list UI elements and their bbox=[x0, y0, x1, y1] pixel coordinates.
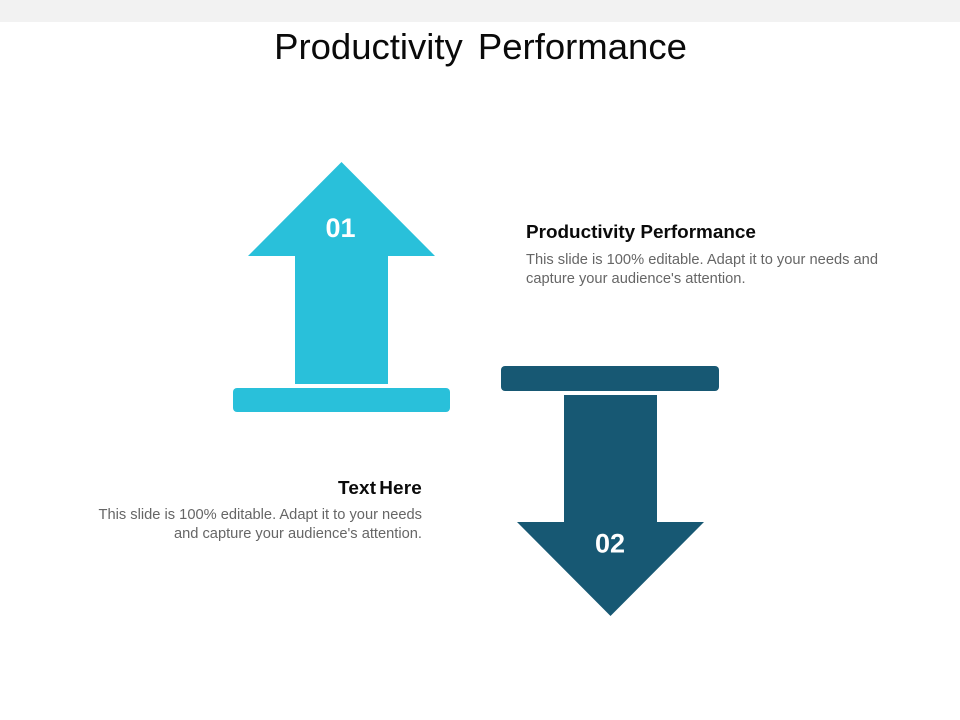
text block: text here bbox=[98, 478, 422, 542]
arrow 01: up arrow bbox=[233, 162, 450, 412]
arrow 01: up arrow: 01 bbox=[325, 213, 356, 243]
description: productivity performance: capture your audience's attention. bbox=[526, 271, 746, 287]
title: Productivity Performance bbox=[274, 26, 687, 67]
description: text here bbox=[98, 507, 422, 542]
heading: productivity performance: Productivity Performance bbox=[526, 222, 756, 242]
text block: productivity performance bbox=[526, 222, 878, 287]
description: productivity performance bbox=[526, 252, 878, 287]
description: text here: and capture your audience's attention. bbox=[174, 526, 422, 542]
top grey band bbox=[0, 0, 960, 22]
heading: text here: Text Here bbox=[338, 478, 422, 499]
description: productivity performance: This slide is 100% editable. Adapt it to your needs and bbox=[526, 252, 878, 268]
arrow 02: down arrow bbox=[501, 366, 719, 616]
arrow 02: down arrow: 02 bbox=[595, 528, 625, 558]
description: text here: This slide is 100% editable. Adapt it to your needs bbox=[99, 507, 422, 523]
